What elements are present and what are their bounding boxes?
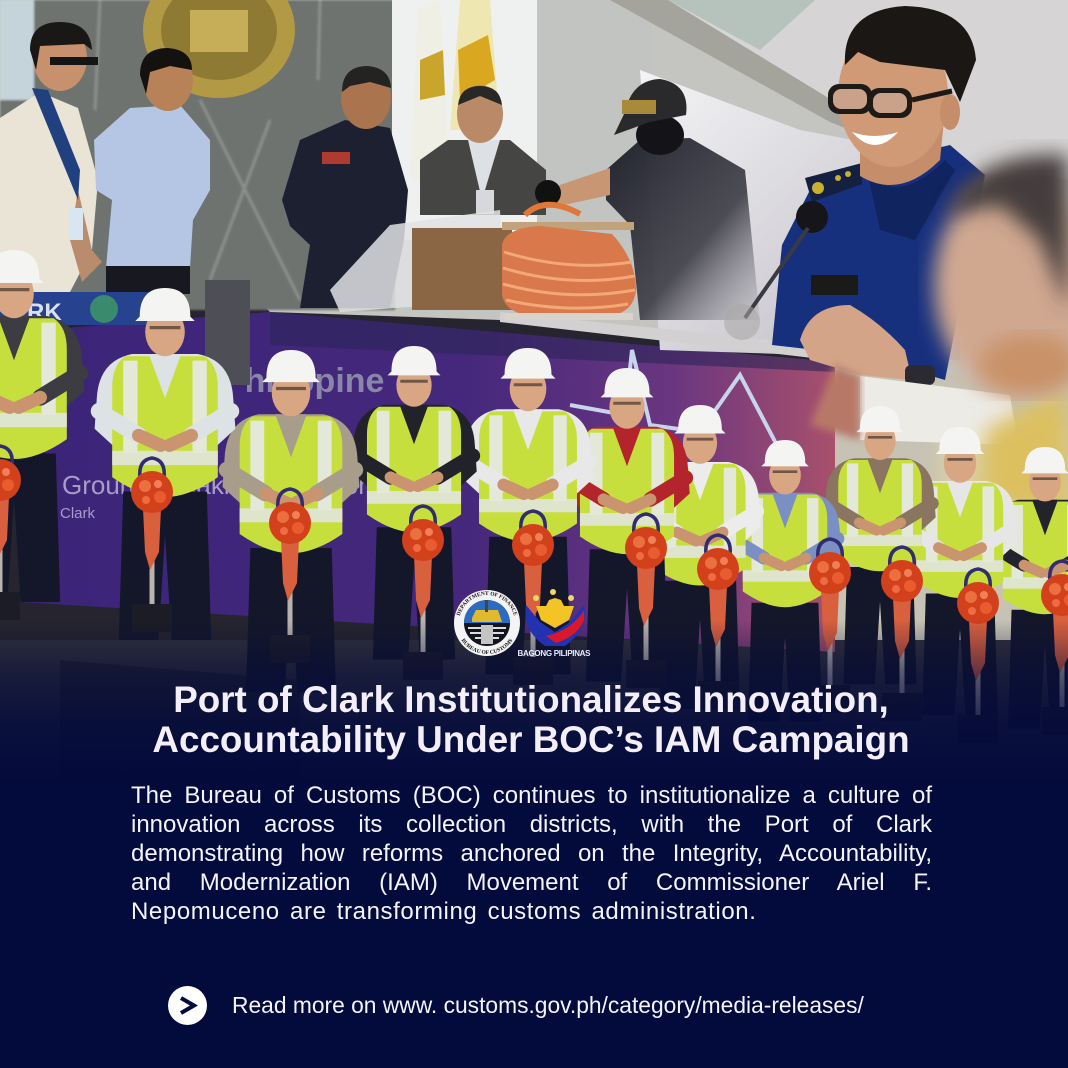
person 1: [0, 250, 84, 602]
body paragraph: [131, 782, 932, 925]
commissioner portrait: [724, 6, 985, 385]
ribbon shovels: [0, 446, 1068, 743]
person 3: [223, 350, 359, 692]
logo: Bagong Pilipinas: [518, 589, 591, 658]
person 6: [564, 368, 690, 682]
logo: Department of Finance Bureau of Customs seal: DEPARTMENT OF FINANCE: [456, 591, 518, 616]
emblem: Bureau of Customs wall seal: [143, 0, 295, 98]
person 9: [824, 406, 936, 684]
person 4: [351, 346, 477, 660]
guest in dark patterned barong: [420, 85, 546, 215]
banner: purple event backdrop: Clark: [60, 505, 96, 522]
read more link: Read more on www. customs.gov.ph/category/media-releases/: [232, 992, 864, 1018]
customs officer in dark uniform: [282, 66, 408, 308]
person 2: [95, 288, 235, 640]
box and orange cable: [330, 205, 636, 320]
ceremony group: top left guests: [0, 22, 760, 320]
logo: Department of Finance Bureau of Customs seal: BUREAU OF CUSTOMS: [461, 638, 512, 654]
person 11: [989, 447, 1068, 729]
navy fade overlay: [0, 620, 1068, 800]
logo: Department of Finance Bureau of Customs seal: [454, 590, 520, 656]
blurred foreground person: [934, 155, 1068, 510]
CRK blue banner: [0, 280, 250, 385]
customs staff opening box: [535, 79, 760, 320]
person 5: [463, 348, 593, 674]
stage: ground and concrete behind the groundbreaking group: [0, 290, 1068, 790]
body paragraph: The Bureau of Customs (BOC) continues to institutionalize a culture of: [131, 782, 932, 809]
logo: Bagong Pilipinas: BAGONG PILIPINAS: [518, 649, 591, 658]
body paragraph: innovation across its collection districts, with the Port of Clark: [131, 811, 932, 838]
body paragraph: and Modernization (IAM) Movement of Commissioner Ariel F.: [131, 869, 932, 896]
banner: purple event backdrop: Ground Breaking Ceremony: [62, 470, 386, 500]
body paragraph: Nepomuceno are transforming customs administration.: [131, 898, 757, 925]
flags: [410, 0, 500, 190]
person 8: [729, 440, 841, 722]
icon: arrow button: [168, 986, 207, 1025]
banner: purple event backdrop: Philippine: [222, 362, 384, 400]
person 10: [902, 427, 1018, 715]
guest in white barong: [0, 22, 102, 292]
body paragraph: demonstrating how reforms anchored on the Integrity, Accountability,: [131, 840, 932, 867]
desk in front of commissioner: [810, 365, 1018, 445]
headline line 2: Accountability Under BOC’s IAM Campaign: [152, 719, 910, 760]
guest in light blue shirt: [94, 48, 210, 294]
person 7: [639, 405, 761, 709]
headline line 1: Port of Clark Institutionalizes Innovation,: [173, 679, 889, 720]
top photo: background walls: [0, 0, 1068, 430]
CRK blue banner: RK: [27, 299, 62, 326]
banner: purple event backdrop: [20, 312, 835, 652]
